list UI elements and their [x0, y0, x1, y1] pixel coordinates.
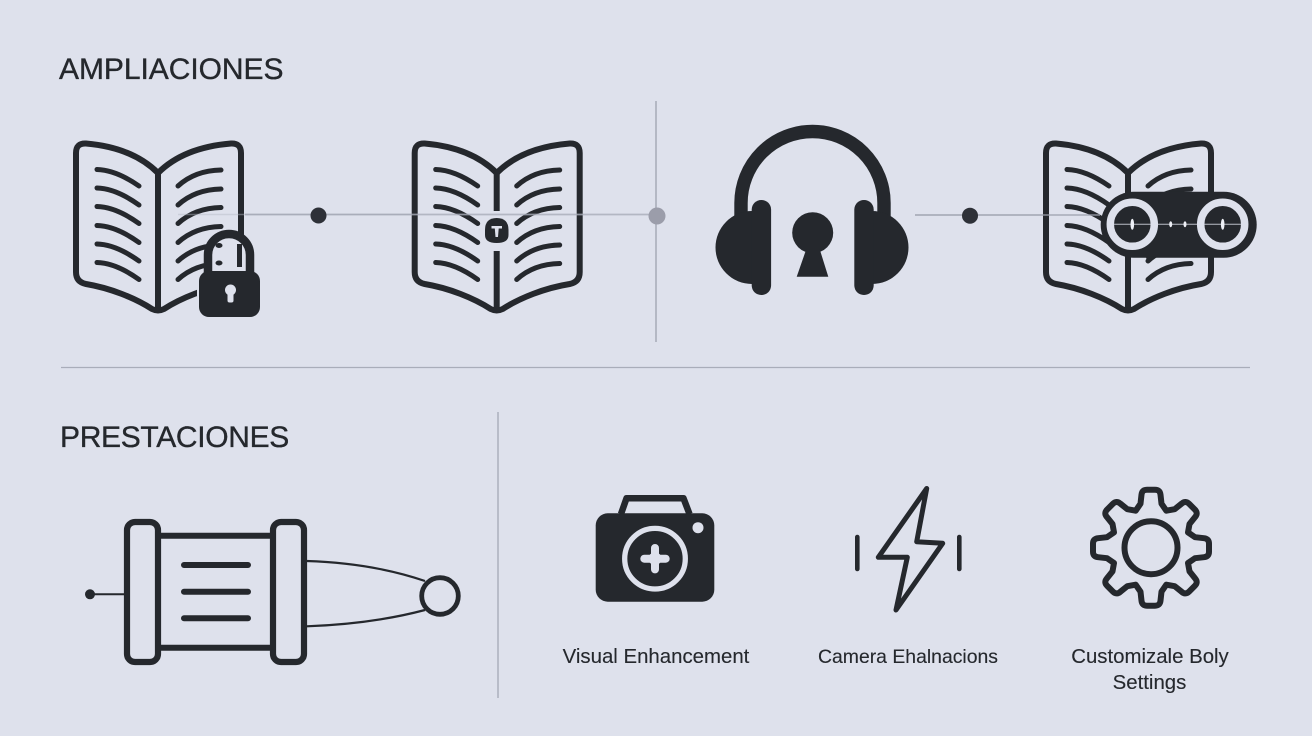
icon: headphones with keyhole	[716, 132, 908, 295]
feature: camera enhancements	[818, 488, 998, 668]
connector with node	[915, 208, 1100, 224]
label: camera enhancements: Camera Ehalnacions	[818, 646, 998, 668]
label: customizable settings	[1071, 646, 1230, 694]
icon: book with padlock	[76, 143, 260, 317]
connector with node	[245, 208, 411, 224]
feature: customizable settings	[1071, 490, 1230, 694]
icon: gear	[1093, 490, 1209, 606]
label: customizable settings: Settings	[1113, 672, 1186, 694]
icon: scroll diagram	[85, 522, 458, 662]
icon: small lock badge	[485, 218, 508, 243]
heading: prestaciones: PRESTACIONES	[60, 421, 289, 454]
icon: book with goggles	[1043, 143, 1257, 310]
icon: padlock	[197, 234, 260, 317]
icon: camera	[596, 498, 714, 602]
panel: prestaciones	[60, 421, 1230, 694]
feature: visual enhancement	[563, 498, 750, 668]
label: customizable settings: Customizale Boly	[1071, 646, 1230, 668]
icon: lightning bolt	[857, 488, 959, 610]
icon: book with center lock	[415, 143, 580, 310]
panel: ampliaciones	[59, 53, 1257, 317]
connector with grey node	[411, 208, 666, 224]
icon: goggles	[1101, 192, 1257, 262]
label: visual enhancement: Visual Enhancement	[563, 646, 750, 668]
heading: ampliaciones: AMPLIACIONES	[59, 53, 283, 86]
